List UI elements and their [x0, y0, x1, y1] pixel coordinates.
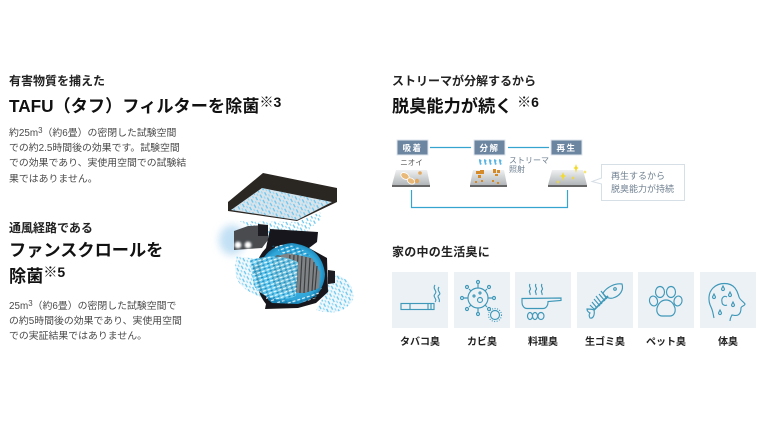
- icon: fish bone: [586, 283, 624, 319]
- heading: household odors: 家の中の生活臭に: [392, 245, 490, 259]
- label: body: 体臭: [718, 337, 738, 348]
- step: adsorption: [392, 140, 430, 187]
- louver unit with lights: [234, 224, 268, 250]
- text block: filter note: での約2.5時間後の効果です。試験空間: [9, 143, 180, 154]
- step: decomposition: ストリーマ: [509, 156, 549, 165]
- label: cooking: 料理臭: [528, 337, 558, 348]
- heading: deodorizing lasts: 脱臭能力が続く ※6: [392, 94, 539, 116]
- heading: TAFU filter: TAFU（タフ）フィルターを除菌※3: [9, 94, 281, 116]
- step: regeneration: [548, 140, 587, 187]
- step: adsorption: 吸着: [402, 143, 423, 153]
- step: decomposition: 分解: [479, 143, 500, 153]
- card: mold odor: [454, 272, 510, 328]
- step: decomposition: [470, 140, 549, 187]
- icon: cigarette: [400, 284, 440, 310]
- icon: frying pan: [521, 284, 562, 320]
- callout: regeneration sustains deodorizing: [592, 164, 684, 200]
- heading: filter kicker: 有害物質を捕えた: [9, 74, 105, 88]
- fan scroll housing: [253, 229, 335, 309]
- card: body odor: [700, 272, 756, 328]
- text block: filter note: 果ではありません。: [9, 174, 98, 185]
- label: garbage: 生ゴミ臭: [585, 337, 625, 348]
- filter box: [228, 173, 337, 238]
- text block: fan note: の約5時間後の効果であり、実使用空間: [9, 316, 182, 327]
- text block: fan note: での実証結果ではありません。: [9, 331, 147, 342]
- airflow through fan: [250, 245, 322, 304]
- outer airflow: [219, 225, 353, 312]
- text block: filter note: での効果であり、実使用空間での試験結: [9, 158, 186, 169]
- heading: fan scroll: ファンスクロールを: [9, 240, 163, 260]
- blower drum: [269, 253, 320, 294]
- step: decomposition: 照射: [509, 164, 525, 174]
- text block: filter note: 約25m3（約6畳）の密閉した試験空間: [9, 126, 176, 139]
- label: tobacco: タバコ臭: [400, 337, 440, 348]
- label: mold: カビ臭: [467, 337, 497, 348]
- text block: fan note: [9, 299, 182, 342]
- heading: fan scroll: 除菌※5: [9, 264, 65, 286]
- icon: head with droplets: [708, 282, 746, 321]
- card: garbage odor: [577, 272, 633, 328]
- text block: fan note: 25m3（約6畳）の密閉した試験空間で: [9, 299, 176, 312]
- callout: regeneration sustains deodorizing: 脱臭能力が持続: [611, 183, 674, 194]
- heading: streamer kicker: ストリーマが分解するから: [392, 74, 536, 88]
- label: pet: ペット臭: [646, 337, 686, 348]
- connector arrows: [412, 148, 568, 208]
- callout: regeneration sustains deodorizing: 再生するから: [611, 170, 665, 181]
- step: adsorption: ニオイ: [400, 158, 423, 167]
- card: cooking odor: [515, 272, 571, 328]
- step: regeneration: 再生: [556, 143, 577, 153]
- card: pet odor: [638, 272, 694, 328]
- text block: filter note: [9, 126, 186, 185]
- heading: fan kicker: 通風経路である: [9, 221, 93, 235]
- heading: fan scroll: [9, 240, 163, 286]
- icon: paw: [648, 286, 683, 317]
- card: tobacco odor: [392, 272, 448, 328]
- icon: mold spore: [460, 280, 502, 322]
